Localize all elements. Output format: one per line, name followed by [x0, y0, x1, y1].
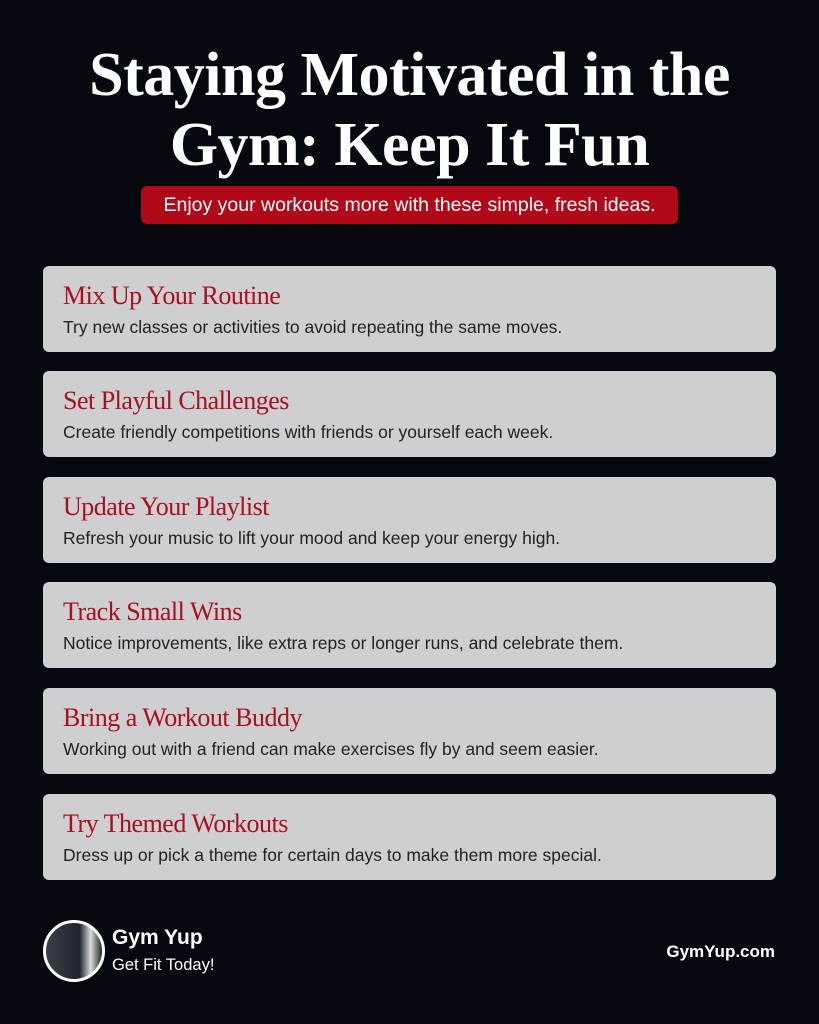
- title: Staying Motivated in the: [89, 41, 730, 109]
- card: themed: Dress up or pick a theme for certain days to make them more special.: [63, 845, 602, 865]
- title: [89, 41, 730, 179]
- footer brand: Get Fit Today!: [112, 956, 214, 974]
- footer brand: [112, 926, 214, 974]
- card: mix up: [43, 266, 776, 352]
- card: playlist: [43, 477, 776, 563]
- card: playlist: Refresh your music to lift your mood and keep your energy high.: [63, 528, 560, 548]
- title: Gym: Keep It Fun: [170, 111, 649, 179]
- card: small wins: [43, 582, 776, 668]
- card: buddy: [43, 688, 776, 774]
- footer avatar: [43, 920, 105, 982]
- card: themed: [43, 794, 776, 880]
- card: mix up: Try new classes or activities to avoid repeating the same moves.: [63, 317, 562, 337]
- subtitle pill: Enjoy your workouts more with these simple, fresh ideas.: [163, 194, 656, 216]
- card: playlist: Update Your Playlist: [63, 492, 269, 521]
- footer brand: Gym Yup: [112, 926, 203, 949]
- card: buddy: Working out with a friend can make exercises fly by and seem easier.: [63, 739, 599, 759]
- card: buddy: Bring a Workout Buddy: [63, 703, 302, 732]
- card: challenges: Create friendly competitions with friends or yourself each week.: [63, 422, 553, 442]
- card: challenges: Set Playful Challenges: [63, 386, 289, 415]
- footer url: GymYup.com: [666, 942, 775, 961]
- card: themed: Try Themed Workouts: [63, 809, 288, 838]
- subtitle pill: [141, 186, 678, 224]
- card: small wins: Notice improvements, like extra reps or longer runs, and celebrate them.: [63, 633, 623, 653]
- card: small wins: Track Small Wins: [63, 597, 242, 626]
- card: mix up: Mix Up Your Routine: [63, 281, 280, 310]
- card: challenges: [43, 371, 776, 457]
